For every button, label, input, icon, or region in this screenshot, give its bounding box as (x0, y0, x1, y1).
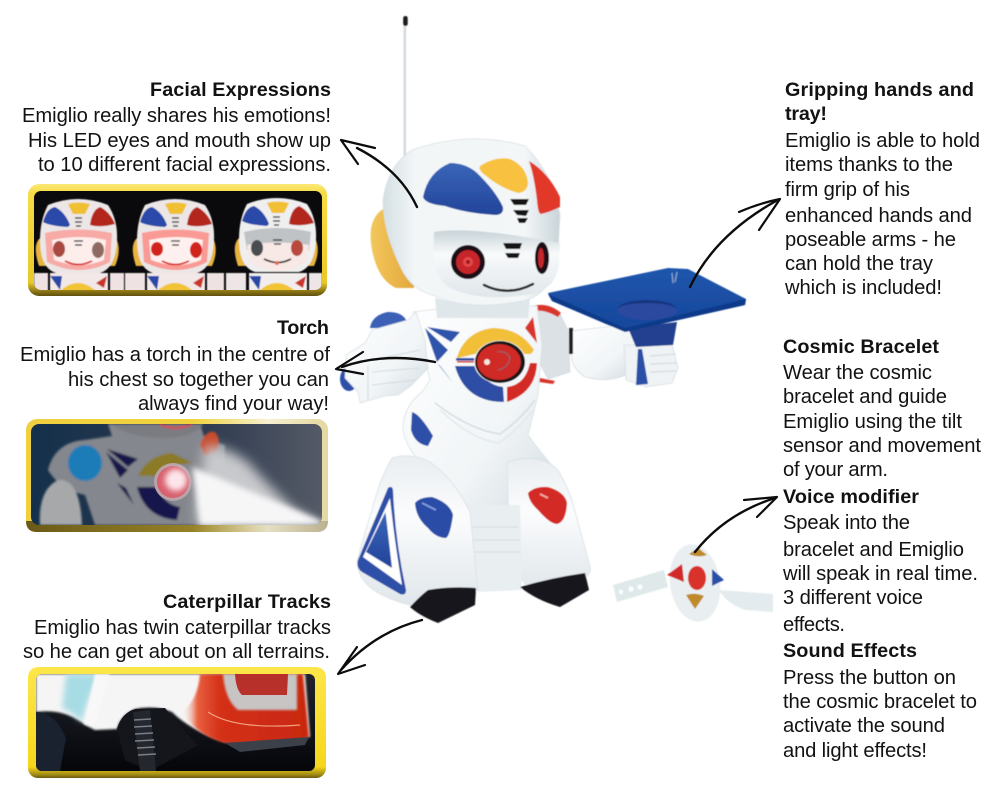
bracelet body and buttons (665, 541, 725, 625)
text: gripping hands and tray: Emiglio is able to hold (785, 130, 980, 152)
arrow: torch (336, 352, 435, 374)
robot figure (340, 16, 746, 623)
text: voice modifier: Voice modifier (783, 486, 919, 508)
chest emblem (425, 317, 537, 402)
photo panel: caterpillar tracks (28, 667, 326, 778)
text: voice modifier: effects. (783, 614, 845, 636)
text: cosmic bracelet: Wear the cosmic (783, 362, 932, 384)
text: cosmic bracelet: sensor and movement (783, 435, 981, 457)
text: torch: always find your way! (138, 393, 329, 415)
text: gripping hands and tray: firm grip of his (785, 179, 910, 201)
text: facial expressions (22, 79, 331, 176)
text: caterpillar tracks: so he can get about on all terrains. (23, 641, 330, 663)
text: voice modifier (782, 486, 978, 636)
text: cosmic bracelet: Emiglio using the tilt (783, 411, 962, 433)
antenna (403, 16, 408, 170)
neck (435, 298, 530, 318)
tray (548, 268, 746, 347)
text: torch (20, 317, 330, 415)
tracks (36, 708, 198, 771)
arrow: bracelet (695, 497, 777, 552)
text: sound effects (783, 640, 977, 762)
left arm and fist (340, 312, 433, 446)
photo panel: facial expressions (28, 184, 327, 296)
text: voice modifier: will speak in real time. (782, 563, 978, 585)
red shell (182, 674, 309, 752)
text: sound effects: Press the button on (783, 667, 956, 689)
text: sound effects: activate the sound (783, 715, 945, 737)
text: sound effects: and light effects! (783, 740, 927, 762)
right leg (507, 458, 590, 592)
text: sound effects: the cosmic bracelet to (783, 691, 977, 713)
text: gripping hands and tray: enhanced hands and (785, 205, 972, 227)
text: torch: Torch (277, 317, 329, 339)
text: torch: Emiglio has a torch in the centre of (20, 344, 330, 366)
text: facial expressions: Facial Expressions (150, 79, 331, 101)
arrow: caterpillar tracks (338, 620, 422, 674)
text: cosmic bracelet: bracelet and guide (783, 386, 947, 408)
arrow: gripping hands (690, 199, 780, 287)
text: gripping hands and tray: poseable arms - he (785, 229, 956, 251)
text: facial expressions: His LED eyes and mouth show up (28, 130, 331, 152)
right arm holding tray (533, 305, 678, 387)
text: voice modifier: bracelet and Emiglio (783, 539, 964, 561)
cosmic bracelet (613, 541, 773, 625)
arrow: facial expressions (341, 140, 417, 207)
head (371, 139, 560, 305)
torch robot body (40, 424, 225, 525)
text: voice modifier: 3 different voice (783, 587, 923, 609)
caterpillar tracks (410, 573, 589, 623)
photo panel: torch (26, 419, 328, 532)
white robot body (36, 674, 310, 742)
face 1 (34, 199, 124, 291)
text: cosmic bracelet: Cosmic Bracelet (783, 336, 939, 358)
text: caterpillar tracks (23, 591, 331, 663)
text: torch: his chest so together you can (68, 369, 329, 391)
centre hips (455, 505, 522, 592)
text: gripping hands and tray: tray! (785, 103, 827, 125)
text: cosmic bracelet: of your arm. (783, 459, 888, 481)
text: caterpillar tracks: Caterpillar Tracks (163, 591, 331, 613)
torch light (154, 463, 192, 501)
face 3 (226, 198, 322, 291)
torso and hips (403, 306, 556, 525)
bracelet strap right (720, 590, 773, 612)
text: gripping hands and tray: can hold the tray (785, 253, 934, 275)
text: caterpillar tracks: Emiglio has twin caterpillar tracks (34, 617, 331, 639)
text: facial expressions: Emiglio really shares his emotions! (22, 105, 331, 127)
text: sound effects: Sound Effects (783, 640, 917, 662)
text: voice modifier: Speak into the (783, 512, 910, 534)
text: facial expressions: to 10 different facial expressions. (38, 154, 331, 176)
bracelet strap left (613, 570, 668, 602)
face 2 (125, 199, 224, 291)
torch beam (197, 446, 322, 525)
text: gripping hands and tray: which is included! (784, 277, 942, 299)
text: gripping hands and tray: Gripping hands and (785, 79, 974, 101)
text: gripping hands and tray: items thanks to the (785, 154, 953, 176)
left leg (357, 456, 478, 607)
text: cosmic bracelet (783, 336, 981, 481)
text: gripping hands and tray (784, 79, 980, 299)
